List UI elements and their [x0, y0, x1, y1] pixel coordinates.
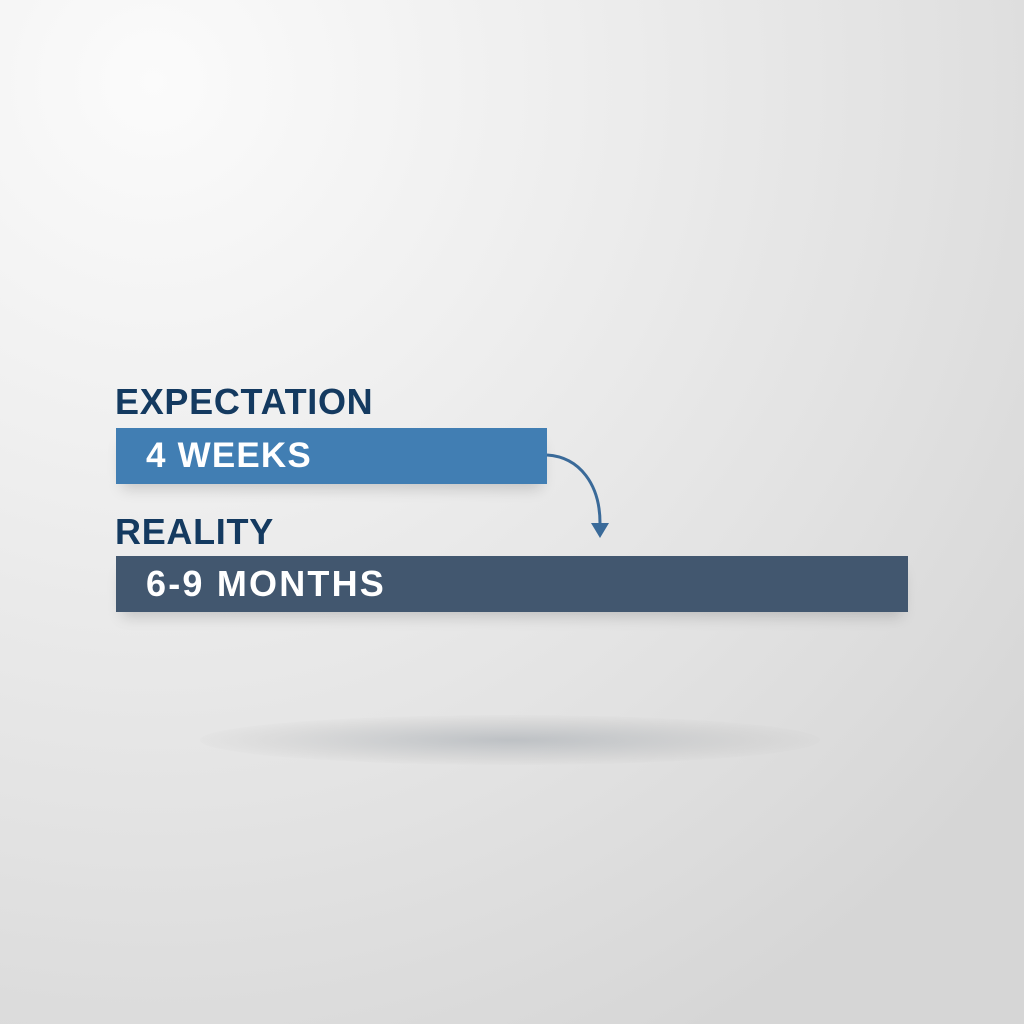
heading: reality: REALITY: [115, 511, 274, 552]
bar: 6-9 months: [116, 556, 908, 612]
floor shadow: [200, 715, 820, 765]
bar: 4 weeks: [116, 428, 547, 484]
bar: 4 weeks: 4 WEEKS: [146, 436, 312, 475]
heading: expectation: EXPECTATION: [115, 381, 373, 422]
bar: 6-9 months: 6-9 MONTHS: [146, 563, 386, 604]
arrow: expectation to reality: [547, 454, 609, 538]
